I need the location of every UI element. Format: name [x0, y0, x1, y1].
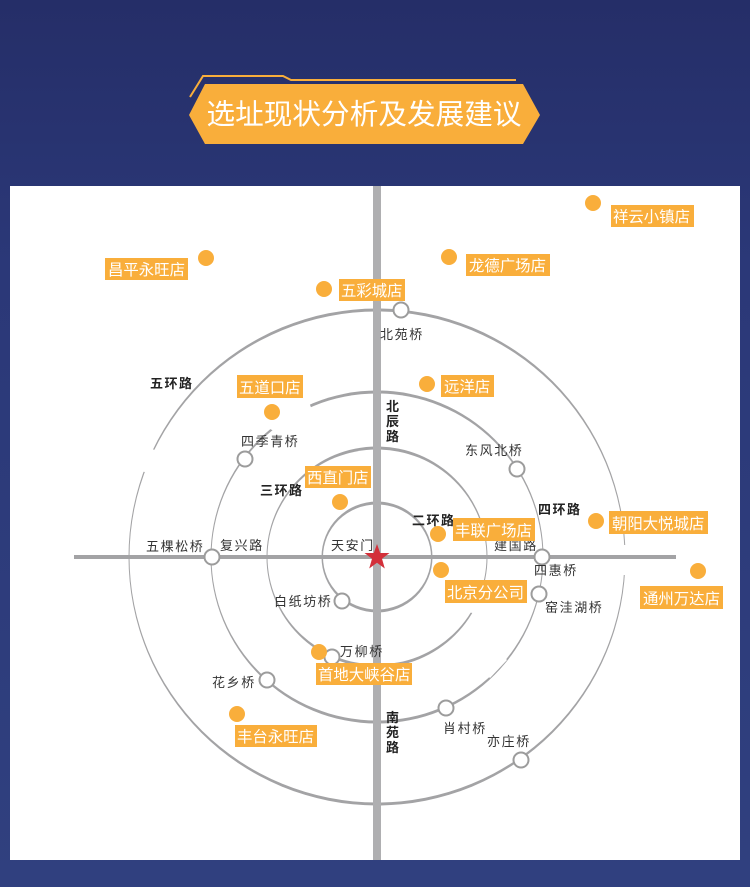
store: 远洋店: [419, 375, 494, 397]
title banner: [189, 76, 540, 144]
store: 五彩城店: 五彩城店: [341, 282, 403, 300]
store: 龙德广场店: [441, 249, 550, 276]
store: 通州万达店: [640, 563, 723, 609]
bridge and place names: 天安门: [331, 538, 375, 553]
store: 五彩城店: [316, 279, 405, 301]
bridge and place names: 肖村桥: [443, 721, 487, 736]
bridge and place names: 窑洼湖桥: [545, 600, 603, 615]
bridge and place names: [146, 327, 603, 749]
store: 北京分公司: 北京分公司: [447, 584, 524, 602]
bridge and place names: 北苑桥: [380, 327, 424, 342]
ring roads: [128, 308, 632, 806]
road names: 四环路: [538, 502, 582, 517]
store: 五道口店: [237, 375, 303, 420]
store: 西直门店: 西直门店: [307, 469, 369, 487]
bridge and place names: 四季青桥: [241, 434, 299, 449]
road names: 辰: [386, 414, 401, 429]
road names: 南: [386, 710, 401, 725]
bridge and place names: 万柳桥: [340, 644, 384, 659]
panel: ring road map: [10, 186, 740, 860]
road names: 路: [386, 740, 401, 755]
bridge and place names: 花乡桥: [212, 675, 256, 690]
roads: [74, 186, 676, 860]
store: 祥云小镇店: 祥云小镇店: [613, 208, 690, 226]
road names: 北: [386, 399, 401, 414]
store: 龙德广场店: 龙德广场店: [469, 257, 546, 275]
road names: 二环路: [412, 513, 456, 528]
store: 首地大峡谷店: 首地大峡谷店: [318, 666, 410, 684]
bridge and place names: 四惠桥: [534, 563, 578, 578]
store: 昌平永旺店: [105, 250, 214, 280]
bridge and place names: 东风北桥: [465, 443, 523, 458]
title: 选址现状分析及发展建议: [206, 99, 522, 131]
bridge and place names: 亦庄桥: [487, 734, 531, 749]
store: 丰台永旺店: [229, 706, 317, 747]
road names: 路: [386, 429, 401, 444]
road names: 三环路: [260, 483, 304, 498]
store: 通州万达店: 通州万达店: [643, 590, 720, 608]
store: 丰联广场店: 丰联广场店: [455, 522, 532, 540]
road names: [150, 376, 582, 755]
store: 西直门店: [305, 466, 371, 510]
road names: 苑: [386, 725, 401, 740]
bridge and place names: 复兴路: [220, 538, 264, 553]
center star: [364, 544, 390, 568]
store: 首地大峡谷店: [311, 644, 412, 685]
bridge nodes: [204, 302, 550, 768]
store: 北京分公司: [433, 562, 527, 603]
store: 远洋店: 远洋店: [444, 378, 490, 396]
bridge and place names: 白纸坊桥: [274, 594, 332, 609]
store: 丰联广场店: [430, 518, 535, 542]
store: 朝阳大悦城店: 朝阳大悦城店: [612, 515, 704, 533]
store: 昌平永旺店: 昌平永旺店: [108, 261, 185, 279]
bridge and place names: 建国路: [494, 538, 538, 553]
store: 祥云小镇店: [585, 195, 694, 227]
store: 丰台永旺店: 丰台永旺店: [237, 728, 314, 746]
road names: 五环路: [150, 376, 194, 391]
store: 朝阳大悦城店: [588, 511, 708, 534]
store: 五道口店: 五道口店: [239, 379, 301, 397]
bridge and place names: 五棵松桥: [146, 539, 204, 554]
